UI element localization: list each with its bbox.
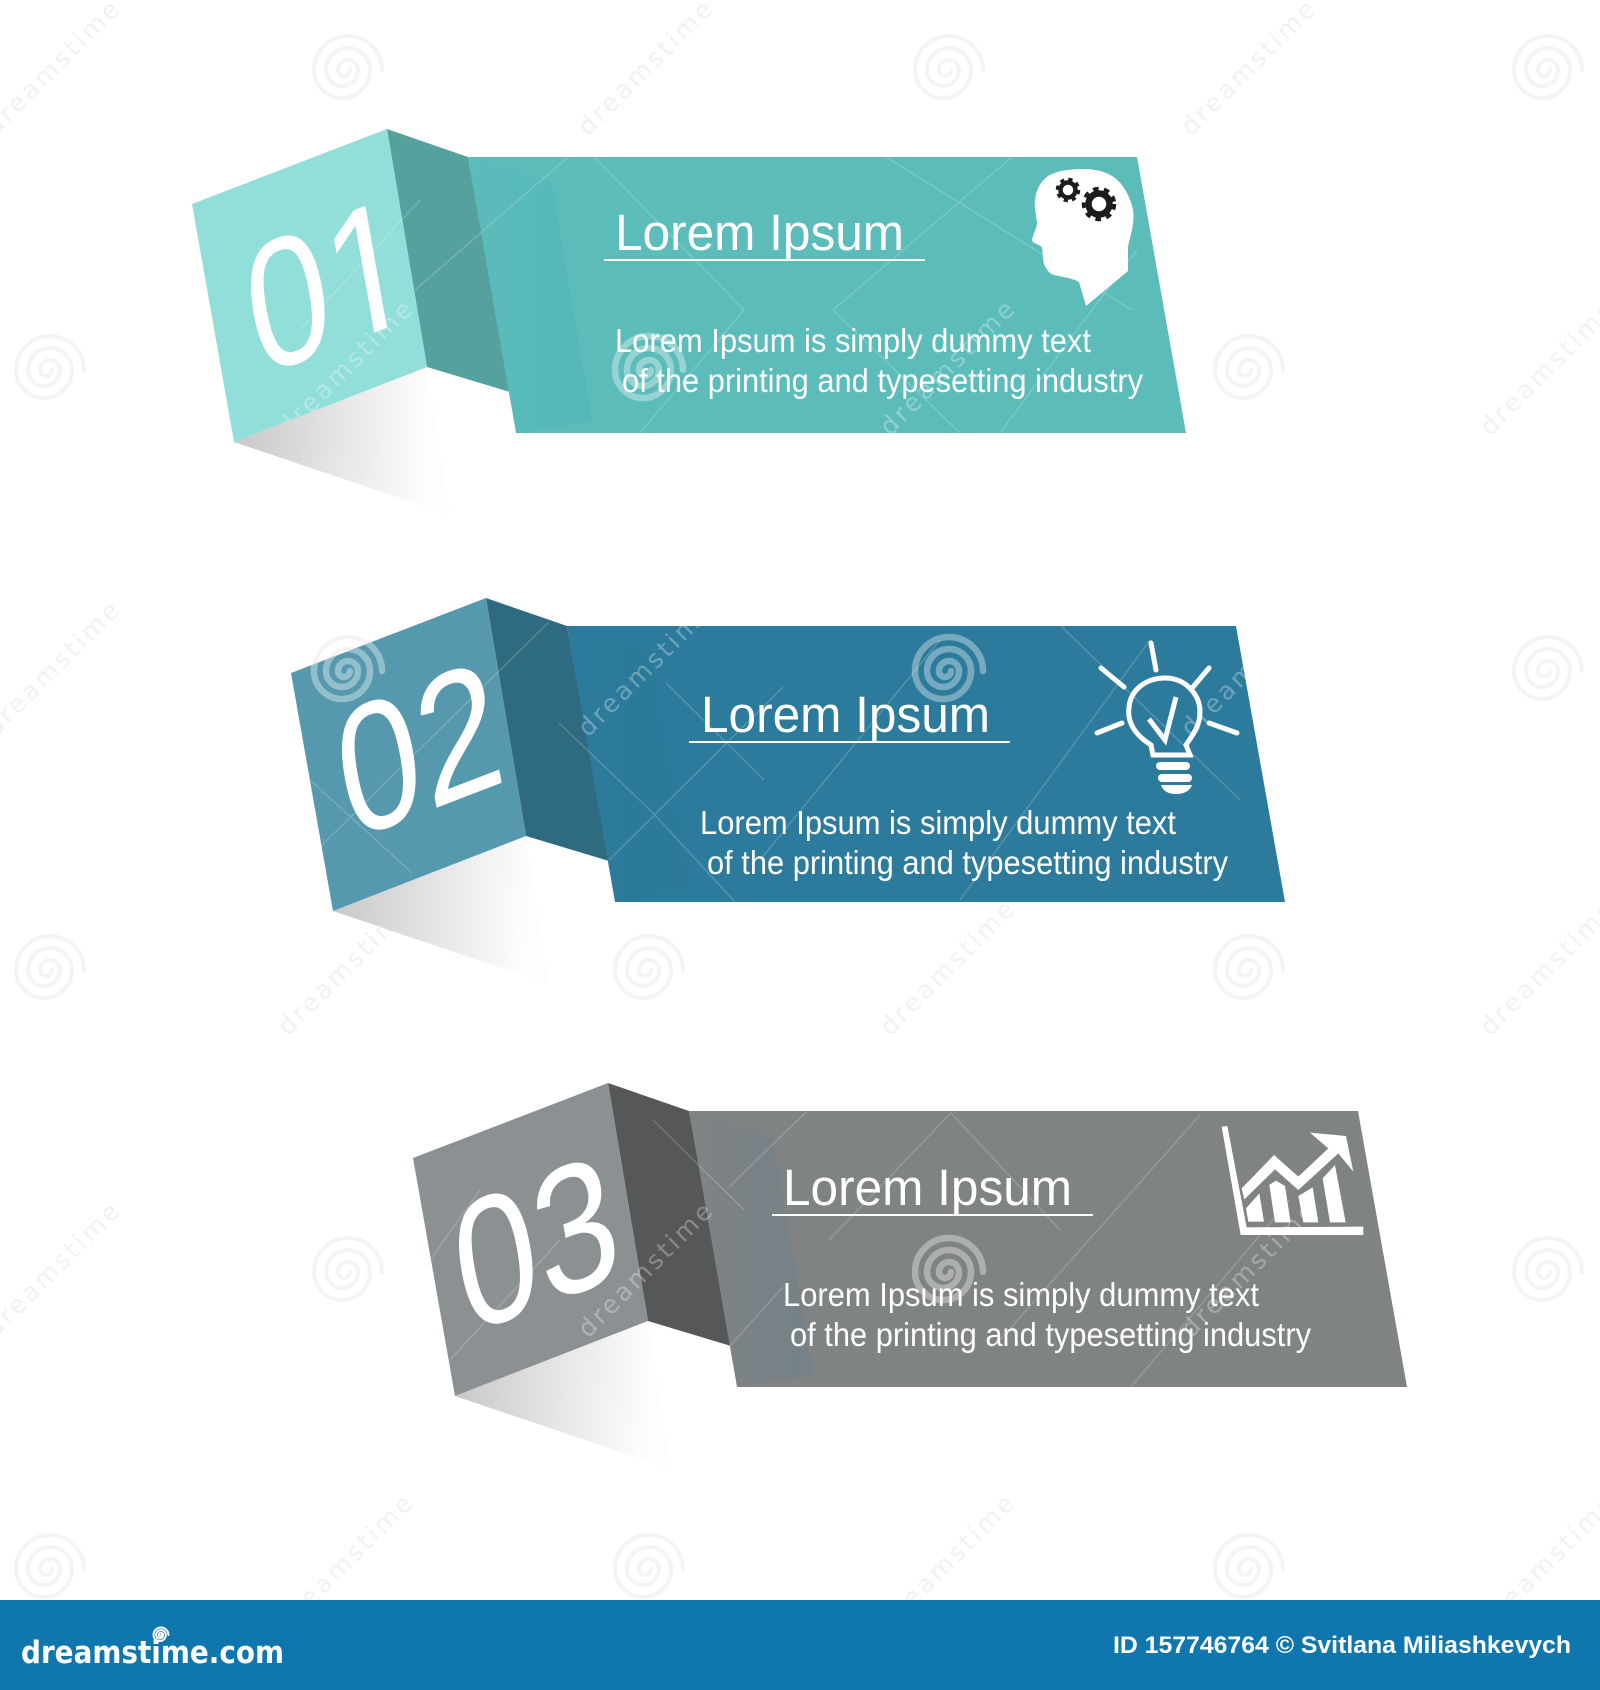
banner fold 02: [568, 626, 691, 902]
cube face 03: [413, 1083, 648, 1396]
cube face 01: [192, 129, 427, 442]
heading underline 02: [689, 741, 1010, 743]
banner 02: [567, 626, 1285, 902]
heading 03: Lorem Ipsum: [783, 1159, 1072, 1216]
panel: step 02: [291, 598, 1285, 984]
body text 03: of the printing and typesetting industry: [790, 1316, 1311, 1353]
body text 03: Lorem Ipsum is simply dummy text: [783, 1276, 1259, 1313]
panel: step 01: [192, 129, 1186, 515]
cube side 02: [486, 598, 609, 861]
footer logo spiral: [154, 1628, 168, 1641]
body text 02: of the printing and typesetting industry: [707, 844, 1228, 881]
watermark over panels: dreamstime: [1175, 1197, 1321, 1343]
watermark over panels: dreamstime: [272, 295, 418, 441]
body text 03: [783, 1276, 1311, 1353]
watermark on white background: dreamstime: [874, 895, 1020, 1041]
watermark over panels: dreamstime: [572, 1197, 718, 1343]
footer logo text: dreamstime.com: [21, 1635, 284, 1671]
watermark over panels: dreamstime: [874, 295, 1020, 441]
watermark on white background: dreamstime: [272, 895, 418, 1041]
heading 01: Lorem Ipsum: [615, 204, 904, 261]
icon: rising bar chart with arrow: [1222, 1126, 1363, 1235]
watermark over panels: dreamstime: [572, 596, 718, 742]
body text 01: Lorem Ipsum is simply dummy text: [615, 322, 1091, 359]
body text 01: [615, 322, 1143, 399]
number 03: 03: [439, 1115, 633, 1373]
body text 02: [700, 804, 1228, 881]
watermark on white background: dreamstime: [874, 1489, 1020, 1635]
banner fold 01: [469, 157, 592, 433]
heading underline 03: [772, 1214, 1093, 1216]
panel: step 03: [413, 1083, 1407, 1469]
icon: light bulb with check mark: [1097, 643, 1237, 794]
watermark over panels: dreamstime: [1175, 596, 1321, 742]
number 01: 01: [231, 157, 425, 415]
cube side 01: [387, 129, 510, 392]
watermark on white background: dreamstime: [272, 1489, 418, 1635]
footer bar: [0, 1600, 1600, 1690]
watermark over panels: [272, 157, 1321, 1388]
body text 01: of the printing and typesetting industry: [622, 362, 1143, 399]
heading 02: Lorem Ipsum: [701, 686, 990, 743]
cube side 03: [608, 1083, 731, 1346]
cube face 02: [291, 598, 526, 911]
body text 02: Lorem Ipsum is simply dummy text: [700, 804, 1176, 841]
cube shadow 01: [234, 367, 450, 515]
banner 03: [689, 1111, 1407, 1387]
icon: head with gears: [1032, 169, 1133, 306]
heading underline 01: [604, 259, 925, 261]
number 02: 02: [322, 621, 516, 879]
footer credit: ID 157746764 © Svitlana Miliashkevych: [1113, 1632, 1571, 1659]
banner 01: [468, 157, 1186, 433]
banner fold 03: [690, 1111, 813, 1387]
cube shadow 03: [455, 1321, 671, 1469]
cube shadow 02: [333, 836, 549, 984]
